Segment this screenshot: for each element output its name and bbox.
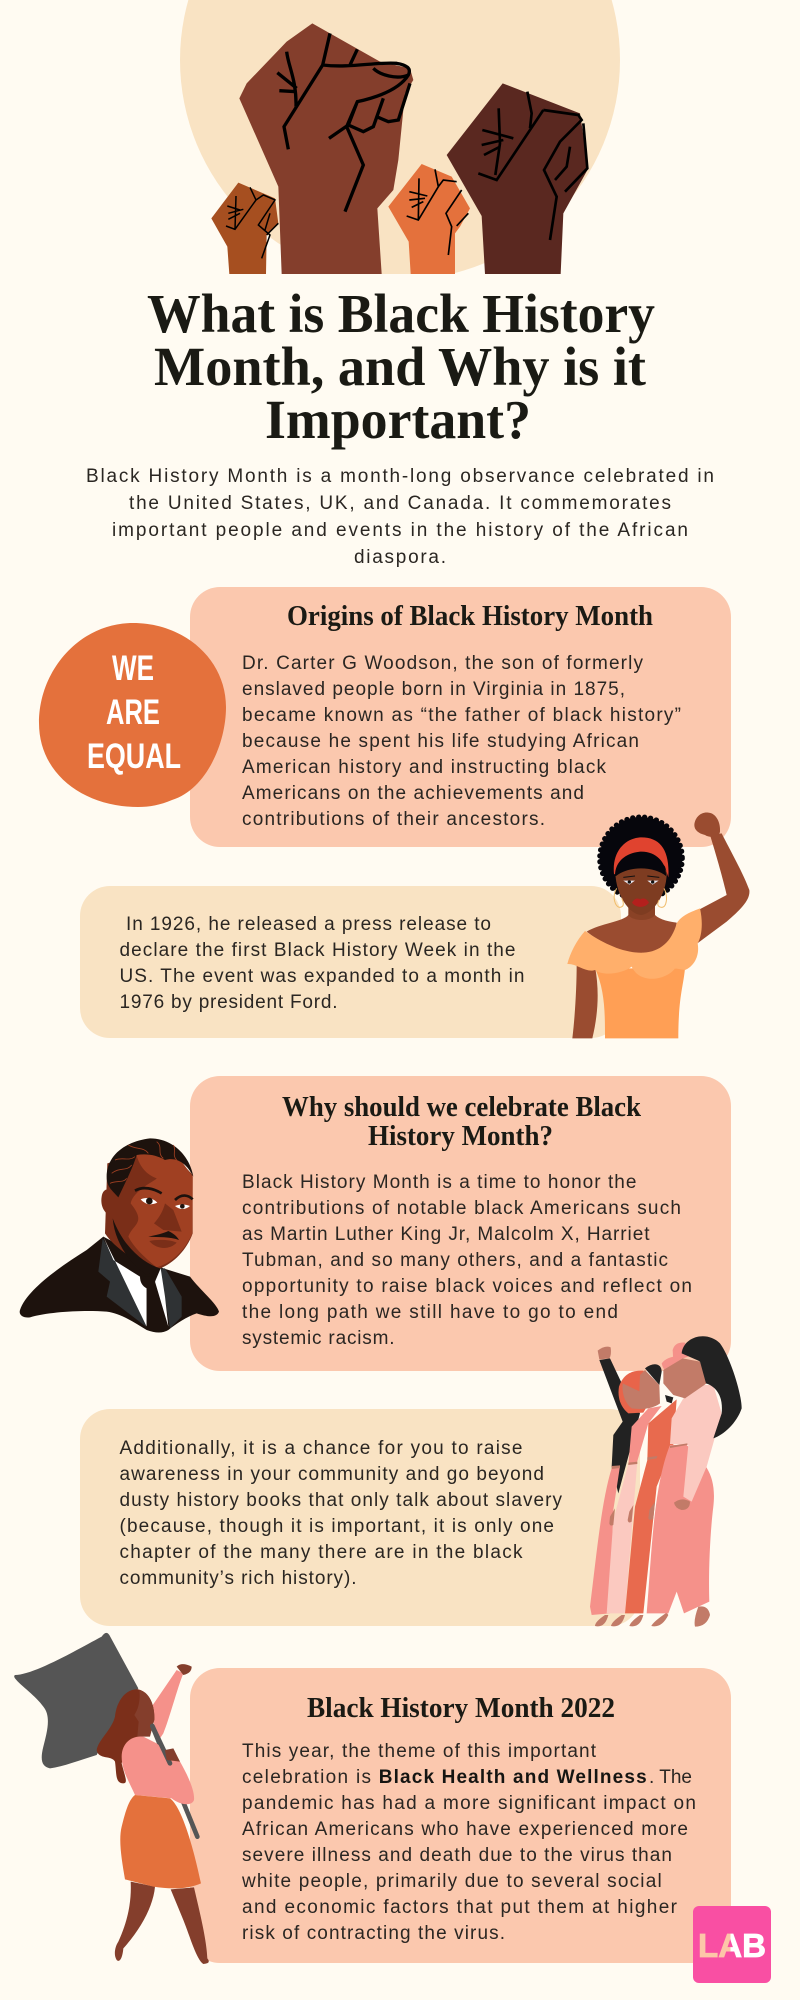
heading: why celebrate bbox=[282, 1092, 641, 1152]
text: 2022 body: severe illness and death due to the virus than bbox=[242, 1845, 672, 1866]
text: additionally body: awareness in your community and go beyond bbox=[120, 1464, 544, 1485]
text: origins body: became known as “the father of black history” bbox=[242, 705, 681, 726]
text: press release: In 1926, he released a press release to bbox=[126, 914, 491, 935]
text: origins body: enslaved people born in Virginia in 1875, bbox=[242, 679, 625, 700]
title: What is Black History bbox=[147, 283, 655, 344]
text: why celebrate body: as Martin Luther King Jr, Malcolm X, Harriet bbox=[242, 1224, 650, 1245]
text: origins body bbox=[242, 653, 681, 830]
text: additionally body bbox=[120, 1438, 562, 1589]
heading: why celebrate: Why should we celebrate Black bbox=[282, 1092, 641, 1123]
text: 2022 body: pandemic has had a more significant impact on bbox=[242, 1793, 696, 1814]
panel: why celebrate bbox=[190, 1076, 731, 1371]
text: why celebrate body: the long path we still have to go to end bbox=[242, 1302, 618, 1323]
text: origins body: because he spent his life studying African bbox=[242, 731, 639, 752]
panel: additionally bbox=[80, 1409, 640, 1626]
icon: group of women bbox=[590, 1336, 742, 1627]
heading: 2022: Black History Month 2022 bbox=[307, 1693, 615, 1724]
background circle bbox=[180, 0, 620, 280]
text: 2022 body: African Americans who have experienced more bbox=[242, 1819, 688, 1840]
badge: we are equal: EQUAL bbox=[87, 737, 181, 776]
intro text: the United States, UK, and Canada. It commemorates bbox=[129, 493, 671, 514]
panel: black history month 2022 bbox=[190, 1668, 731, 1963]
title: Month, and Why is it bbox=[154, 336, 647, 397]
text: press release bbox=[120, 914, 524, 1013]
logo: LAB bbox=[693, 1906, 771, 1983]
text: why celebrate body: Black History Month is a time to honor the bbox=[242, 1172, 636, 1193]
fist: dark brown bbox=[447, 83, 588, 274]
intro text: Black History Month is a month-long observance celebrated in bbox=[86, 466, 714, 487]
text: why celebrate body bbox=[242, 1172, 692, 1349]
panel: press release bbox=[80, 886, 621, 1038]
icon: woman with raised fist bbox=[567, 813, 749, 1038]
icon: portrait of Martin Luther King Jr bbox=[20, 1138, 219, 1332]
text: why celebrate body: opportunity to raise black voices and reflect on bbox=[242, 1276, 692, 1297]
text: 2022 body: This year, the theme of this important bbox=[242, 1741, 597, 1762]
text: 2022 body: . The bbox=[649, 1767, 692, 1788]
text: additionally body: chapter of the many there are in the black bbox=[120, 1542, 523, 1563]
title bbox=[147, 283, 655, 450]
fist: medium orange bbox=[388, 164, 470, 274]
text: origins body: contributions of their ancestors. bbox=[242, 809, 545, 830]
text: additionally body: (because, though it is important, it is only one bbox=[120, 1516, 554, 1537]
text: 2022 body: white people, primarily due to several social bbox=[241, 1871, 662, 1892]
text: press release: declare the first Black History Week in the bbox=[120, 940, 516, 961]
fist: large brown bbox=[239, 23, 413, 274]
badge: we are equal: ARE bbox=[106, 693, 160, 732]
intro text: diaspora. bbox=[354, 547, 446, 568]
text: origins body: Americans on the achievements and bbox=[242, 783, 584, 804]
text: additionally body: community’s rich history). bbox=[120, 1568, 356, 1589]
text: why celebrate body: Tubman, and so many others, and a fantastic bbox=[242, 1250, 668, 1271]
panel: origins bbox=[190, 587, 731, 847]
intro text bbox=[86, 466, 714, 568]
text: additionally body: Additionally, it is a chance for you to raise bbox=[120, 1438, 522, 1459]
text: press release: 1976 by president Ford. bbox=[120, 992, 338, 1013]
text: press release: US. The event was expanded to a month in bbox=[120, 966, 524, 987]
intro text: important people and events in the history of the African bbox=[112, 520, 688, 541]
text: additionally body: dusty history books that only talk about slavery bbox=[120, 1490, 562, 1511]
icon: woman with flag bbox=[14, 1633, 209, 1964]
icon: raised fists bbox=[211, 23, 588, 274]
text: 2022 body bbox=[241, 1741, 696, 1944]
text: 2022 body: Black Health and Wellness bbox=[379, 1767, 647, 1788]
title: Important? bbox=[265, 389, 531, 450]
text: why celebrate body: systemic racism. bbox=[242, 1328, 394, 1349]
text: why celebrate body: contributions of notable black Americans such bbox=[242, 1198, 681, 1219]
logo: LAB: LAB bbox=[698, 1927, 766, 1964]
text: 2022 body: risk of contracting the virus. bbox=[242, 1923, 505, 1944]
text: origins body: American history and instructing black bbox=[242, 757, 606, 778]
badge: we are equal: WE bbox=[112, 649, 154, 688]
heading: why celebrate: History Month? bbox=[368, 1121, 553, 1152]
text: origins body: Dr. Carter G Woodson, the son of formerly bbox=[242, 653, 644, 674]
fist: small rust bbox=[211, 183, 278, 274]
text: 2022 body: and economic factors that put them at higher bbox=[242, 1897, 678, 1918]
badge: we are equal bbox=[39, 623, 226, 807]
heading: origins: Origins of Black History Month bbox=[287, 601, 653, 632]
text: 2022 body: celebration is bbox=[242, 1767, 371, 1788]
